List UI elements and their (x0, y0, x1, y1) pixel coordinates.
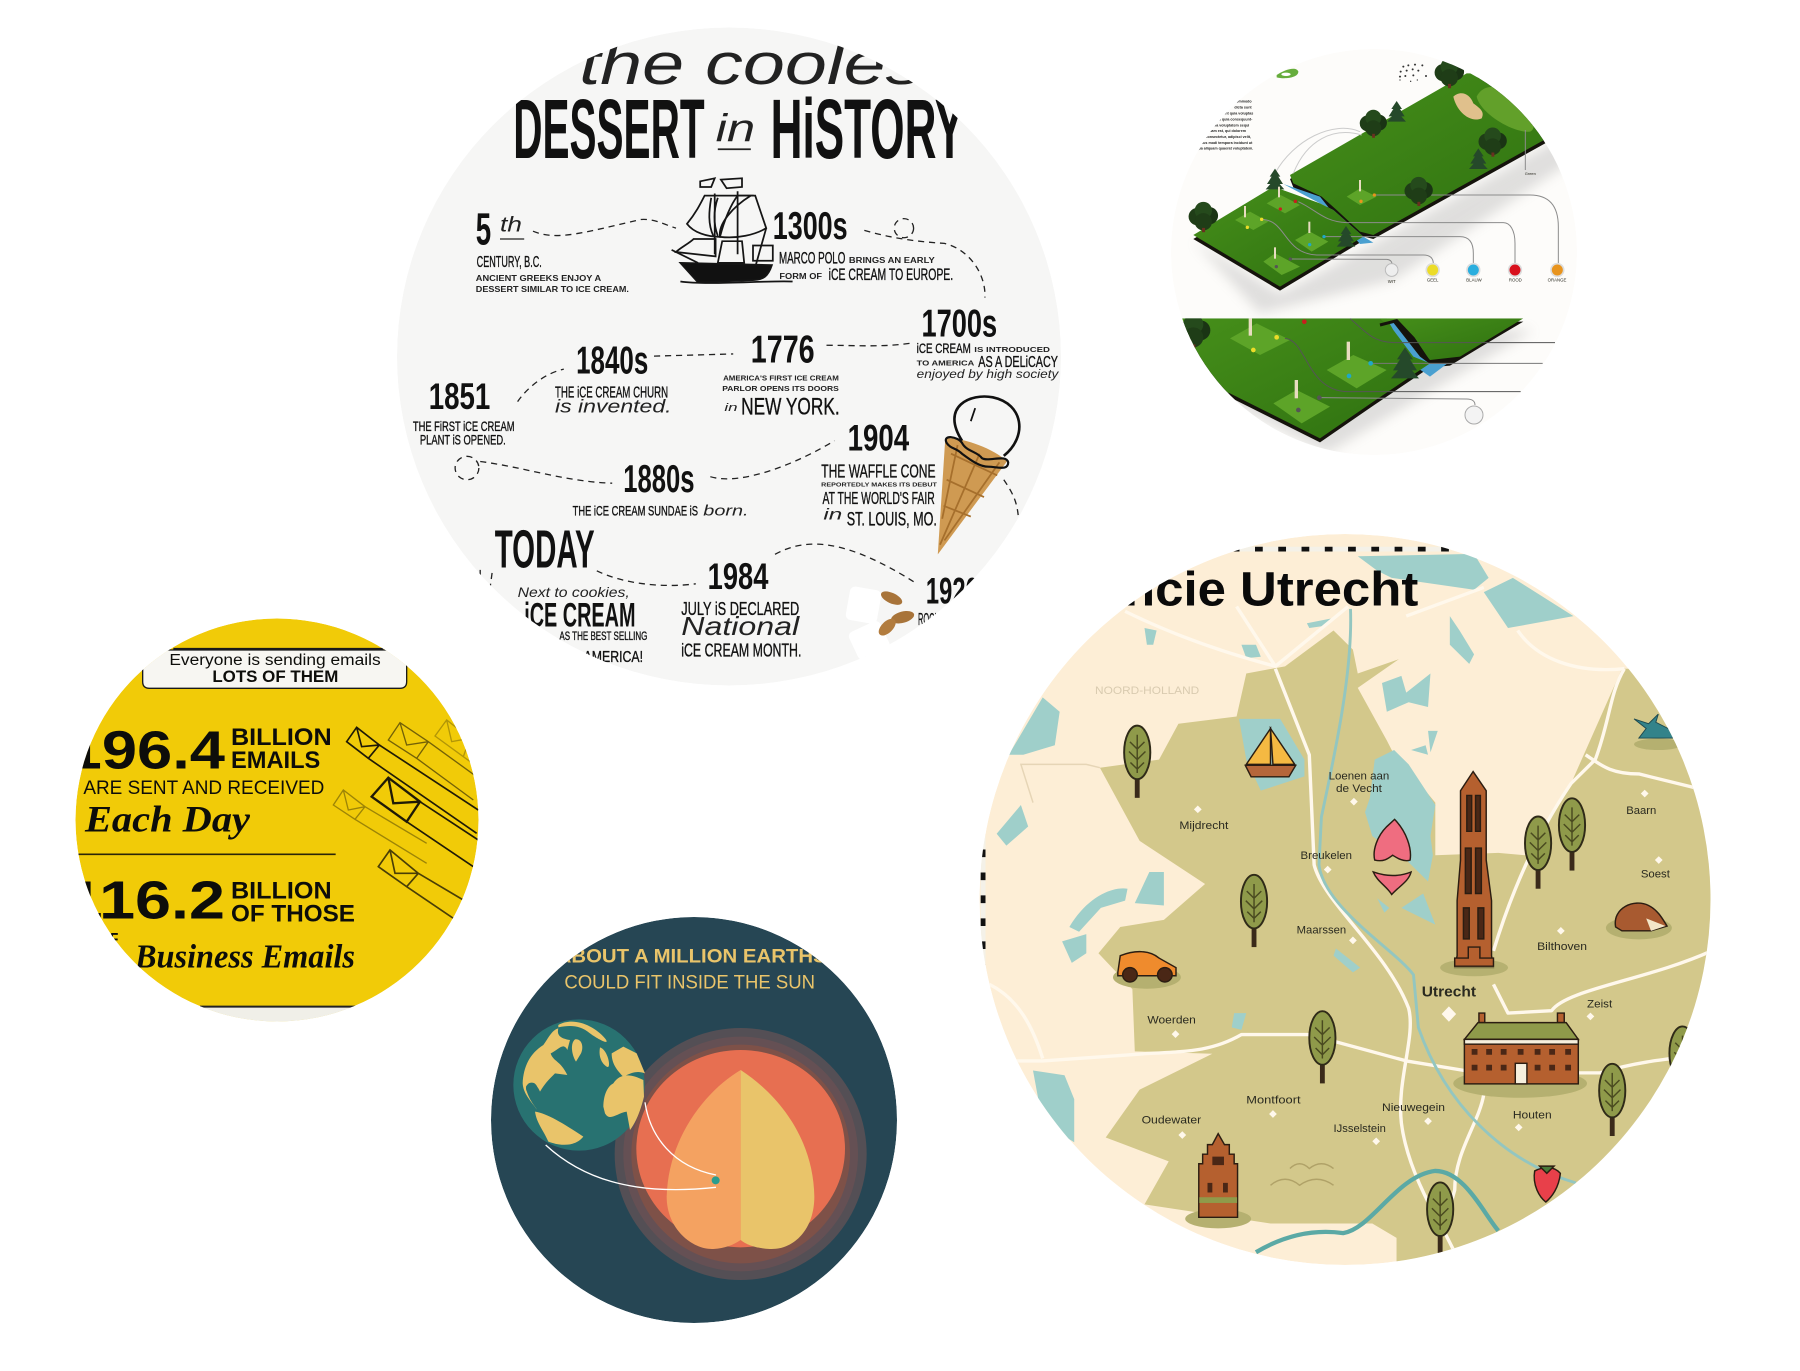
map: province boundary (1021, 764, 1100, 803)
statistic: 116.2 billion of those: OF (100, 929, 118, 948)
1904 block: 1904 (848, 417, 909, 459)
banner: everyone is sending emails: Everyone is sending emails (169, 652, 381, 669)
1880s block (572, 464, 746, 516)
today block: iCE CREAM (524, 596, 636, 634)
map: province land area (1098, 630, 1746, 1276)
1904 block: in (823, 507, 843, 524)
map labels: towns: Utrecht (1422, 984, 1476, 1000)
1840s block: 1840s (576, 339, 648, 382)
icon: trees (1124, 726, 1696, 1255)
icon: marshmallows and almonds (845, 586, 916, 661)
text block: small caption: sed quia consequunt- (1215, 117, 1253, 121)
banner: everyone is sending emails: LOTS OF THEM (212, 667, 338, 686)
1920s block partly cropped (918, 578, 974, 626)
1904 block: AT THE WORLD'S FAIR (823, 488, 935, 508)
icon: seal (1634, 714, 1683, 750)
upper golf strip (1189, 58, 1593, 313)
statistic: 196.4 billion emails: ARE SENT AND RECEIVED (83, 778, 324, 799)
icon: flying envelopes (333, 720, 490, 918)
heading: the coolest dessert in history (516, 46, 958, 159)
icon: gabled house (1185, 1134, 1251, 1228)
icon: green blob hole marker (1277, 69, 1298, 78)
icon: manor house (1453, 1013, 1587, 1098)
1851 block: THE FiRST iCE CREAM (413, 418, 515, 434)
map labels: towns (1095, 685, 1671, 1135)
1300s block (774, 212, 952, 280)
icon: strawberry (1534, 1166, 1560, 1202)
map labels: towns: de Vecht (1336, 783, 1383, 795)
statistic: 196.4 billion emails: Each Day (84, 799, 251, 840)
map labels: towns: Woerden (1147, 1015, 1196, 1027)
map labels: towns: Soest (1641, 869, 1671, 881)
text block: small caption: dicta sunt (1234, 106, 1252, 110)
map labels: towns: Nieuwegein (1382, 1102, 1445, 1114)
statistic: 116.2 billion of those (85, 881, 354, 968)
map: roads (970, 587, 1712, 1252)
legend: ball colours: ROOD (1509, 278, 1522, 283)
today block (495, 530, 647, 662)
panel: provincie Utrecht map circle (970, 534, 1746, 1276)
heading: about a million earths: COULD FIT INSIDE THE SUN (564, 973, 815, 994)
1300s block: FORM OF (779, 272, 822, 281)
map labels: towns: Montfoort (1246, 1095, 1301, 1106)
1920s block partly cropped: 1920s (926, 570, 992, 611)
1984 block (681, 562, 800, 657)
statistic: 196.4 billion emails: EMAILS (231, 747, 320, 774)
legend: ball colours: ORANGE (1548, 277, 1566, 282)
today block: AS THE BEST SELLING (559, 629, 647, 643)
5th century block: th (500, 212, 522, 237)
text block: small caption: a eius modi tempora incidunt ut (1197, 141, 1253, 145)
1840s block: THE iCE CREAM CHURN (555, 384, 668, 401)
1776 block: in (724, 402, 738, 414)
statistic: 196.4 billion emails: BILLION (231, 724, 332, 751)
statistic: 196.4 billion emails: 196.4 (67, 720, 225, 780)
1776 block: NEW YORK. (741, 394, 840, 421)
checkered border (983, 549, 1450, 970)
1700s block: iCE CREAM (917, 340, 971, 356)
1700s block: TO AMERICA (917, 359, 975, 368)
1776 block: PARLOR OPENS ITS DOORS (722, 386, 839, 393)
text block: small caption: quam est, qui dolorem (1207, 129, 1247, 133)
map: rivers (1256, 609, 1576, 1252)
map labels: towns: IJsselstein (1334, 1123, 1386, 1135)
1880s block: born. (703, 503, 749, 519)
statistic: 116.2 billion of those: BILLION (231, 877, 332, 904)
legend: ball colours: GEEL (1427, 278, 1439, 283)
today block: AMERICA! (584, 649, 643, 666)
1851 block: 1851 (429, 375, 490, 417)
map labels: towns: Oudewater (1142, 1115, 1201, 1127)
map labels: towns: Houten (1513, 1109, 1552, 1121)
map labels: towns: Bilthoven (1537, 941, 1587, 953)
map labels: towns: Maarssen (1297, 925, 1346, 937)
statistic: 116.2 billion of those: 116.2 (67, 870, 225, 930)
icon: flock of birds (1399, 64, 1427, 82)
1904 block (821, 417, 938, 530)
1300s block: 1300s (773, 204, 848, 248)
1840s block (555, 346, 669, 412)
panel: earth and sun circle (491, 917, 897, 1323)
text block: small caption (1198, 100, 1254, 150)
text block: small caption: A, consectetur, adipisci velit, (1201, 135, 1251, 139)
map labels: towns: Mijdrecht (1179, 820, 1229, 832)
1984 block: iCE CREAM MONTH. (681, 640, 801, 661)
5th century block (476, 213, 628, 292)
1851 block (412, 382, 514, 445)
lower golf strip enlarged (1176, 314, 1555, 453)
icon: sailing ship (672, 178, 793, 283)
1300s block: iCE CREAM TO EUROPE. (829, 265, 953, 284)
legend: ball colours: Green (1525, 171, 1536, 176)
illustration: earth globe (513, 1019, 645, 1151)
1851 block: PLANT iS OPENED. (420, 432, 506, 448)
icon: birds sketch (1271, 1164, 1334, 1185)
1904 block: ST. LOUIS, MO. (847, 509, 937, 530)
1904 block: THE WAFFLE CONE (821, 461, 936, 482)
connector lines (546, 1102, 716, 1190)
panel: golf course circle (1182, 61, 1566, 452)
1700s block: enjoyed by high society (917, 367, 1059, 381)
map labels: towns: Zeist (1587, 998, 1613, 1010)
1984 block: JULY iS DECLARED (681, 598, 799, 619)
1700s block: 1700s (922, 302, 997, 346)
heading: about a million earths: ABOUT A MILLION EARTHS (557, 947, 827, 968)
1880s block: THE iCE CREAM SUNDAE iS (573, 502, 698, 518)
1984 block: National (681, 611, 801, 641)
map labels: towns: NOORD-HOLLAND (1095, 685, 1199, 697)
map labels: towns: Baarn (1626, 805, 1656, 817)
map labels: towns: Breukelen (1301, 850, 1352, 862)
banner: everyone is sending emails (143, 649, 407, 688)
icon: waffle cone and scoop (938, 397, 1019, 554)
today block: TODAY (495, 519, 595, 579)
map labels: towns: Loenen aan (1329, 771, 1389, 783)
map markers: town diamonds (1172, 790, 1663, 1145)
1776 block: 1776 (751, 328, 815, 372)
text block: small caption: commodo (1234, 100, 1252, 104)
1700s block: AS A DELiCACY (978, 354, 1058, 371)
heading: about a million earths (565, 949, 822, 988)
5th century block: 5 (476, 203, 491, 255)
legend: ball colours: WIT (1388, 279, 1396, 284)
1776 block (722, 335, 838, 415)
1904 block: REPORTEDLY MAKES ITS DEBUT (821, 483, 938, 489)
legend: ball colours (1385, 171, 1566, 284)
heading: the coolest dessert in history: the coolest (579, 33, 948, 97)
statistic: 116.2 billion of those: OF THOSE (231, 901, 355, 928)
1300s block: MARCO POLO (779, 249, 845, 268)
panel: ice cream history circle (397, 28, 1061, 686)
legend: ball colours: BLAUW (1466, 278, 1483, 283)
marker: earth to scale (712, 1176, 720, 1184)
text block: small caption: una voluptatem sequi (1212, 123, 1249, 127)
1700s block: IS INTRODUCED (974, 345, 1051, 354)
today block: Next to cookies, (518, 584, 630, 600)
1880s block: 1880s (623, 457, 694, 501)
timeline dashed path (455, 219, 1018, 586)
map: water bodies (997, 554, 1573, 1142)
5th century block: ANCIENT GREEKS ENJOY A (476, 273, 601, 283)
icon: Dom tower (1440, 772, 1508, 976)
text block: small caption: aliqua aliquam quaerat voluptatem. (1192, 147, 1253, 151)
1984 block: 1984 (708, 555, 769, 597)
1840s block: is invented. (555, 396, 672, 416)
heading: the coolest dessert in history: HiSTORY (771, 82, 964, 177)
5th century block: DESSERT SIMILAR TO ICE CREAM. (476, 284, 629, 294)
illustration: sun cross section (615, 1028, 867, 1280)
icon: car (1113, 952, 1181, 989)
icon: bikini (1373, 819, 1411, 894)
heading: the coolest dessert in history: DESSERT (513, 82, 705, 177)
panel: yellow emails circle (67, 618, 490, 1027)
1920s block partly cropped: ROCKY (918, 609, 945, 629)
1776 block: AMERICA'S FIRST ICE CREAM (723, 375, 839, 382)
5th century block: CENTURY, B.C. (477, 254, 542, 271)
heading: the coolest dessert in history: in (716, 107, 755, 150)
statistic: 116.2 billion of those: Business Emails (134, 938, 355, 975)
title: provincie Utrecht: Provincie Utrecht (997, 563, 1418, 616)
1300s block: BRINGS AN EARLY (849, 256, 936, 265)
text block: small caption: sint quia voluptas (1222, 112, 1253, 116)
icon: hedgehog (1606, 903, 1672, 939)
1700s block (916, 309, 1059, 380)
icon: sailboat (1245, 728, 1296, 777)
bottom divider (200, 1006, 356, 1022)
statistic: 196.4 billion emails (82, 728, 330, 840)
